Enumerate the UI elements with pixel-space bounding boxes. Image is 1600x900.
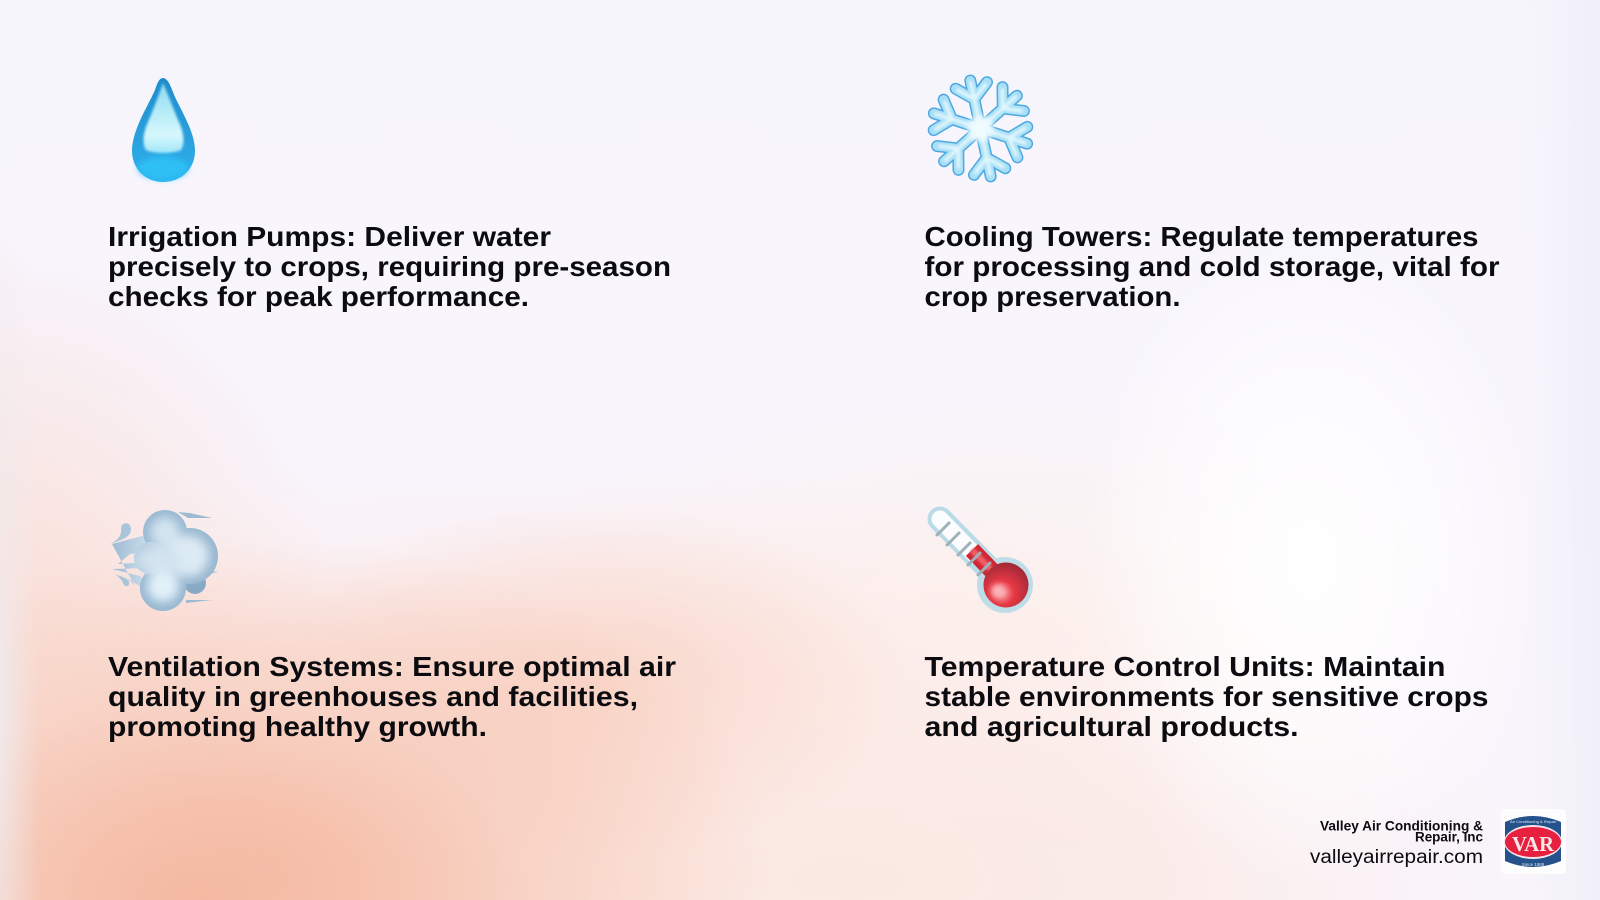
text: irrigation pumps [108, 221, 671, 312]
text: cooling towers: crop preservation. [924, 281, 1180, 312]
text: irrigation pumps: precisely to crops, requiring pre-season [108, 251, 671, 282]
text: temperature control units: stable environments for sensitive crops [924, 681, 1488, 712]
icon: wind cloud [110, 510, 218, 611]
text: cooling towers [924, 221, 1500, 312]
company name and website: valleyairrepair.com [1310, 847, 1483, 868]
company name and website: Repair, Inc [1415, 830, 1483, 844]
logo: VAR badge: Since 1989 [1522, 862, 1545, 867]
text: cooling towers: Cooling Towers: Regulate temperatures [924, 221, 1478, 252]
logo: VAR badge [1501, 809, 1566, 874]
text: ventilation systems: quality in greenhouses and facilities, [108, 681, 638, 712]
text: cooling towers: for processing and cold storage, vital for [924, 251, 1500, 282]
company name and website: Valley Air Conditioning & [1320, 818, 1483, 834]
text: ventilation systems: promoting healthy growth. [108, 711, 487, 742]
icon: snowflake [929, 77, 1032, 180]
text: ventilation systems [108, 651, 676, 742]
text: temperature control units: Temperature Control Units: Maintain [924, 651, 1446, 682]
text: temperature control units [924, 651, 1488, 742]
text: irrigation pumps: Irrigation Pumps: Deliver water [108, 221, 551, 252]
logo: VAR badge: Air Conditioning & Repair [1510, 819, 1557, 824]
icon: thermometer [937, 519, 1033, 613]
text: ventilation systems: Ventilation Systems: Ensure optimal air [108, 651, 676, 682]
text: irrigation pumps: checks for peak performance. [108, 281, 529, 312]
text: temperature control units: and agricultural products. [924, 711, 1298, 742]
icon: water drop [132, 78, 195, 182]
company name and website [1310, 818, 1483, 868]
logo: VAR badge: VAR [1512, 832, 1555, 856]
